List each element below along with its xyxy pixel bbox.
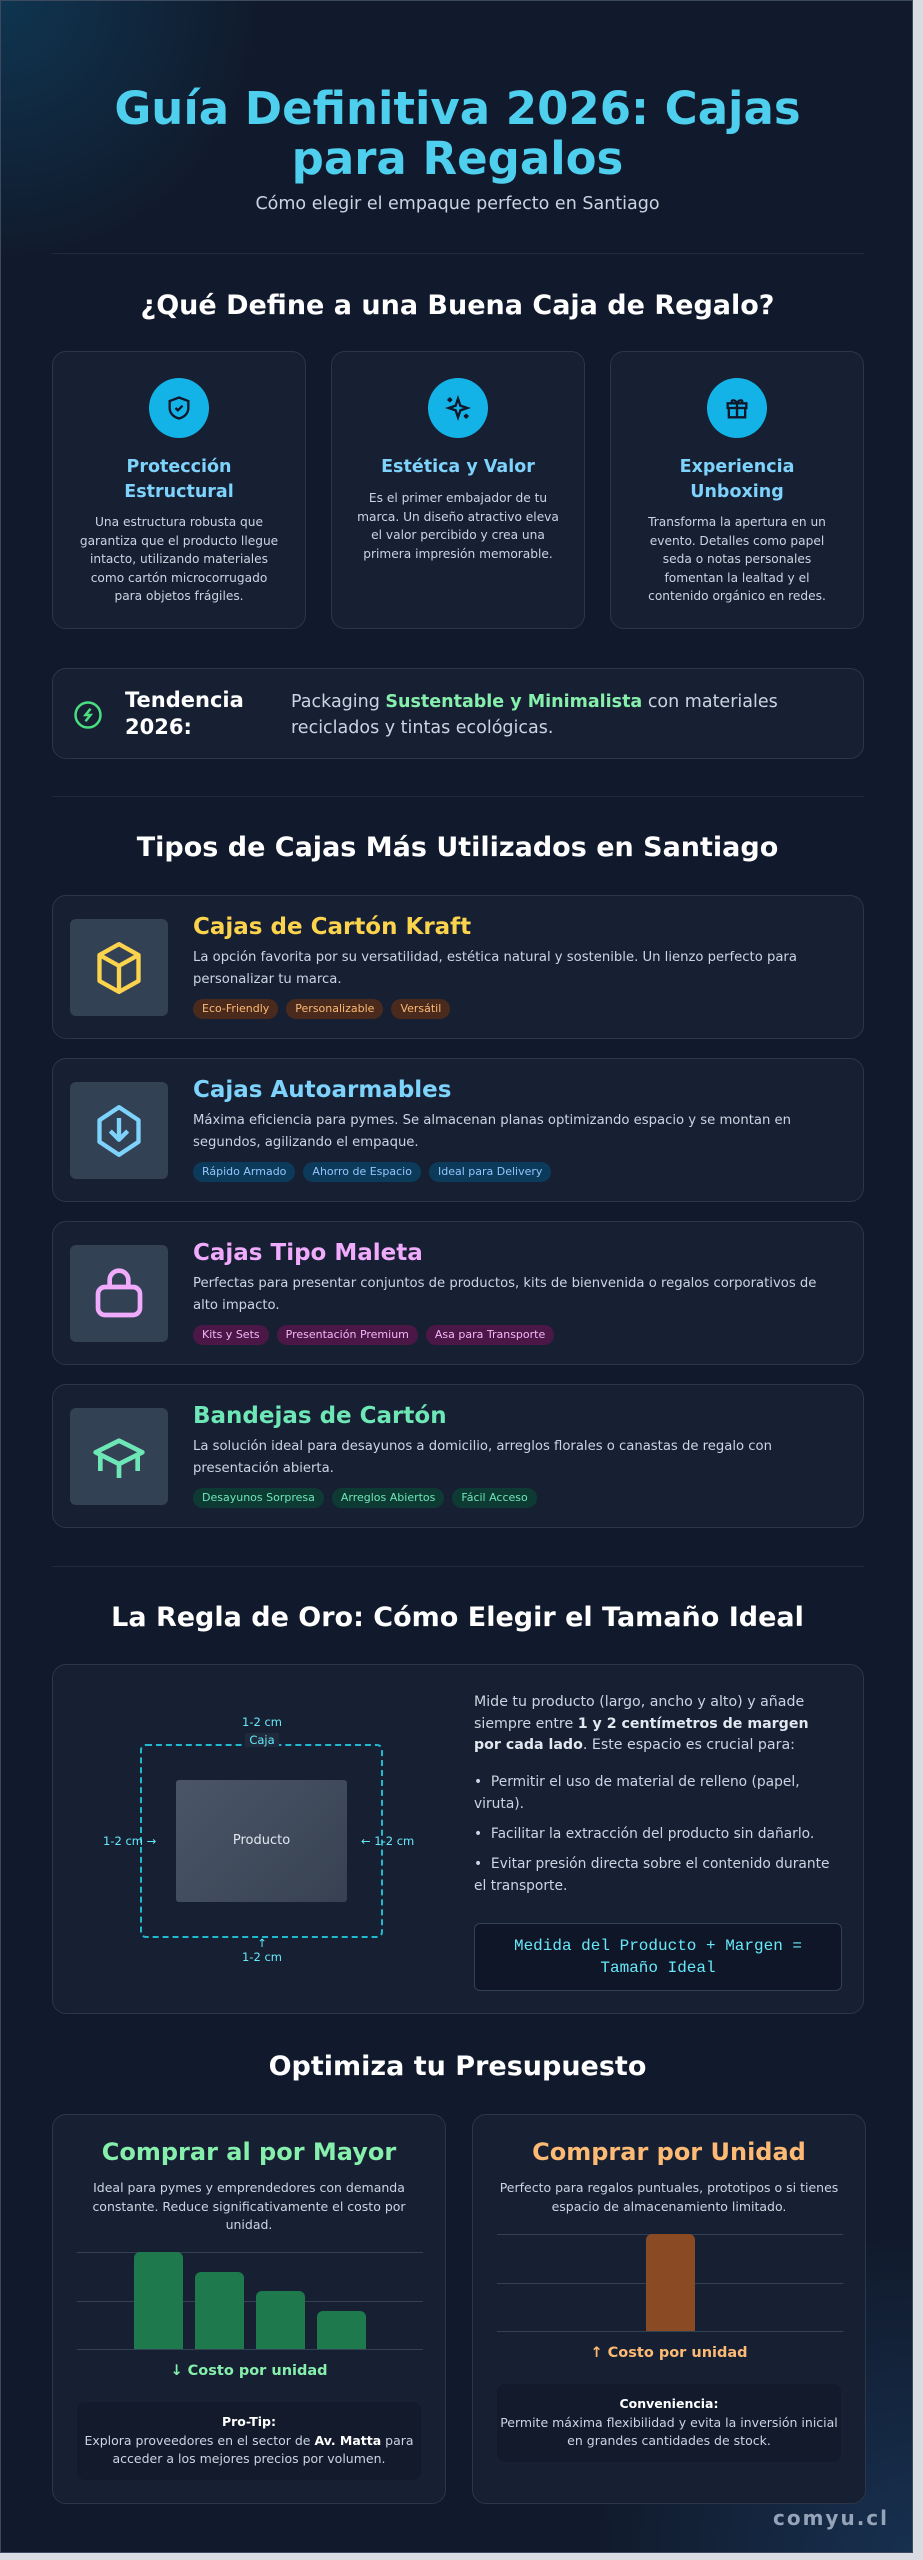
panel: kraft: Cajas de Cartón Kraft [193,914,471,940]
text: proteccion [124,457,234,502]
formula box: Tamaño Ideal [600,1959,716,1977]
diagram: box margins: 1-2 cm [242,1715,282,1729]
panel: kraft: Versátil [400,1002,441,1015]
text: proteccion: Protección [127,457,231,477]
diagram: box margins [103,1715,414,1964]
panel: bandejas: Arreglos Abiertos [341,1491,435,1504]
panel: maleta: Asa para Transporte [435,1328,545,1341]
formula box: Medida del Producto + Margen = [514,1937,802,1955]
text: regla [474,1694,829,1894]
panel: kraft: Eco-Friendly [202,1002,269,1015]
panel: por mayor: ↓ Costo por unidad [170,2363,328,2379]
bar chart: unidad [497,2234,843,2332]
panel: autoarmables [52,1058,864,1202]
callout: pro-tip: Pro-Tip: [222,2414,276,2429]
panel: bandejas: La solución ideal para desayunos a domicilio, arreglos florales o canastas de regalo con presentación abierta. [193,1439,772,1476]
heading: que define: ¿Qué Define a una Buena Caja de Regalo? [141,290,774,321]
panel: autoarmables: Cajas Autoarmables [193,1077,451,1103]
callout: tendencia: 2026: [125,715,192,739]
callout: tendencia: Packaging Sustentable y Minimalista con materiales reciclados y tintas ecológicas. [291,692,778,738]
panel: proteccion [52,351,306,629]
panel: por mayor [52,2114,446,2504]
callout: conveniencia: Conveniencia: [620,2396,718,2411]
callout: pro-tip [77,2402,421,2480]
formula box [474,1923,842,1991]
panel: kraft: La opción favorita por su versatilidad, estética natural y sostenible. Un lienzo perfecto para personalizar tu marca. [193,950,797,987]
panel: tamaño [52,1664,864,2014]
diagram: box margins: Caja [249,1733,275,1747]
text: regla: Mide tu producto (largo, ancho y alto) y añade siempre entre 1 y 2 centímetros de margen por cada lado. Este espacio es crucial para: [474,1694,809,1753]
icon: tray [70,1408,168,1505]
title: para Regalos [292,132,623,185]
panel: por mayor: Ideal para pymes y emprendedores con demanda constante. Reduce significativamente el costo por unidad. [92,2180,406,2232]
panel: kraft [52,895,864,1039]
panel: autoarmables: Rápido Armado [202,1165,286,1178]
panel: bandejas: Desayunos Sorpresa [202,1491,315,1504]
subtitle: Cómo elegir el empaque perfecto en Santiago [255,194,660,214]
panel: maleta: Cajas Tipo Maleta [193,1240,423,1266]
panel: bandejas [52,1384,864,1528]
panel: maleta: Perfectas para presentar conjuntos de productos, kits de bienvenida o regalos corporativos de alto impacto. [193,1276,816,1313]
diagram: box margins: 1-2 cm → [103,1834,156,1848]
callout: tendencia [52,668,864,759]
panel: maleta [52,1221,864,1365]
panel: maleta: Presentación Premium [286,1328,409,1341]
panel: estetica: Es el primer embajador de tu marca. Un diseño atractivo eleva el valor percibido y crea una primera impresión memorable. [357,491,559,560]
panel: maleta: Kits y Sets [202,1328,260,1341]
panel: unboxing: Unboxing [690,482,784,502]
panel: autoarmables: Ideal para Delivery [438,1165,542,1178]
icon: cube [70,919,168,1016]
text: proteccion: Estructural [124,482,234,502]
title [114,82,801,185]
panel: por unidad: ↑ Costo por unidad [590,2345,748,2361]
callout: conveniencia [497,2384,841,2462]
text: regla: • Permitir el uso de material de relleno (papel, viruta). • Facilitar la extracción del producto sin dañarlo. • Evitar presión directa sobre el contenido durante el transporte. [474,1774,829,1894]
diagram: box margins: 1-2 cm [242,1950,282,1964]
icon: briefcase [70,1245,168,1342]
panel: estetica [331,351,585,629]
panel: kraft: Personalizable [295,1002,374,1015]
panel: bandejas: Bandejas de Cartón [193,1403,447,1429]
icon: bolt [74,701,102,729]
icon: gift [707,378,767,438]
icon: shield [149,378,209,438]
icon: sparkles [428,378,488,438]
panel: por unidad [472,2114,866,2504]
panel: por unidad: Comprar por Unidad [532,2138,806,2166]
panel: unboxing: Transforma la apertura en un evento. Detalles como papel seda o notas personales fomentan la lealtad y el contenido orgánico en redes. [648,515,826,603]
panel: proteccion: Una estructura robusta que garantiza que el producto llegue intacto, utilizando materiales como cartón microcorrugado para objetos frágiles. [80,515,278,603]
callout: pro-tip: Explora proveedores en el sector de Av. Matta para acceder a los mejores precios por volumen. [84,2432,414,2466]
diagram: box margins: ↑ [257,1936,267,1950]
panel: estetica: Estética y Valor [381,457,535,477]
panel: unboxing: Experiencia [680,457,794,477]
panel: bandejas: Fácil Acceso [461,1491,528,1504]
callout: conveniencia: Permite máxima flexibilidad y evita la inversión inicial en grandes cantidades de stock. [500,2414,838,2448]
heading: tipos: Tipos de Cajas Más Utilizados en Santiago [137,832,778,863]
panel: por unidad: Perfecto para regalos puntuales, prototipos o si tienes espacio de almacenamiento limitado. [500,2180,838,2214]
heading: regla de oro: La Regla de Oro: Cómo Elegir el Tamaño Ideal [111,1602,804,1633]
panel: autoarmables: Ahorro de Espacio [312,1165,412,1178]
heading: presupuesto: Optimiza tu Presupuesto [269,2051,646,2082]
diagram: box margins: ← 1-2 cm [361,1834,414,1848]
footer: brand: comyu.cl [773,2506,889,2530]
bar chart: mayor [77,2252,423,2350]
panel: autoarmables: Máxima eficiencia para pymes. Se almacenan planas optimizando espacio y se montan en segundos, agilizando el empaque. [193,1113,791,1150]
title: Guía Definitiva 2026: Cajas [114,82,801,135]
panel: unboxing [610,351,864,629]
callout: tendencia: Tendencia [125,688,244,712]
panel: por mayor: Comprar al por Mayor [102,2138,396,2166]
diagram: box margins: Producto [233,1833,290,1848]
icon: hex arrow [70,1082,168,1179]
